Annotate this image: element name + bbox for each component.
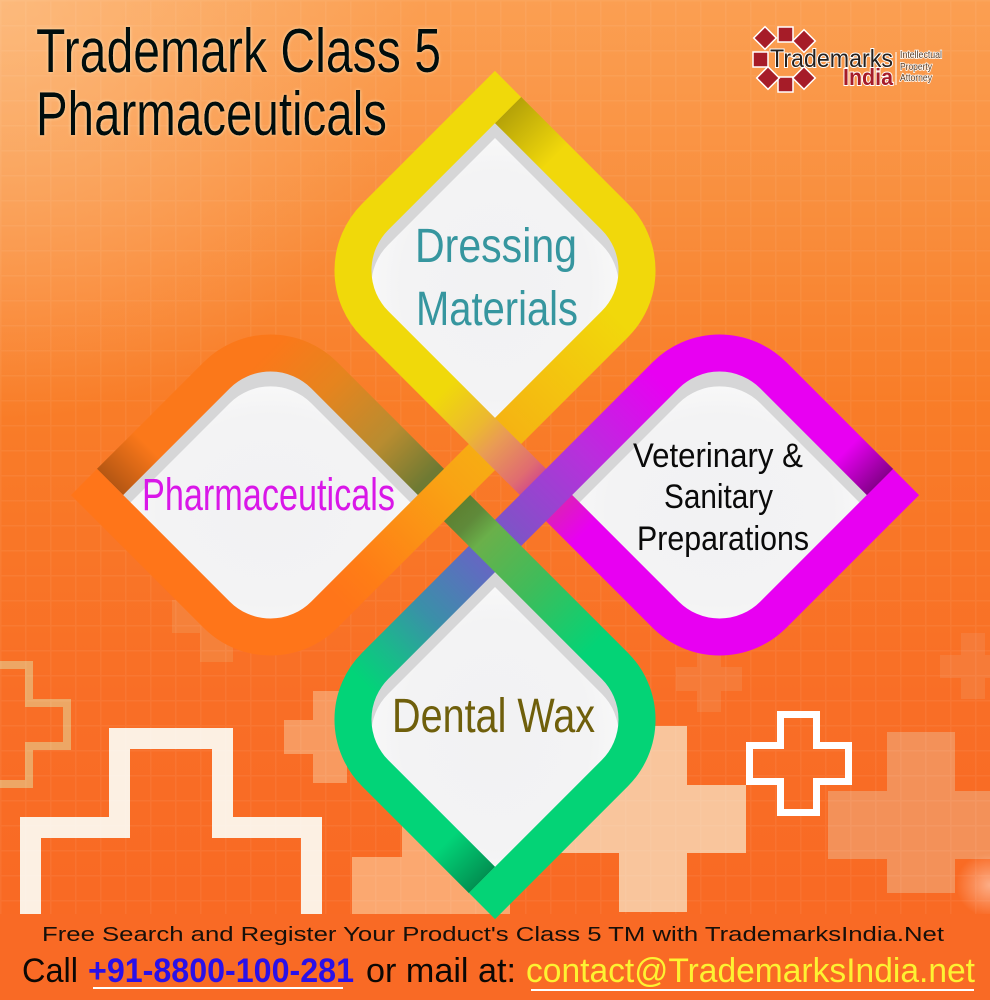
footer contact line: Call [22,952,78,990]
panel: Dental Wax: Dental Wax [392,690,595,743]
ribbon: yellow to orange [84,110,637,637]
footer contact line: +91-8800-100-281 [88,952,354,990]
footer contact line: or mail at: [366,952,516,990]
footer band [0,914,990,1000]
panel: Dressing Materials: Dressing [415,220,577,273]
panel: Veterinary and Sanitary Preparations: Sanitary [664,478,773,516]
title [36,17,441,149]
ribbon: yellow to magenta, lower half under purple [516,465,906,637]
woven ribbon petals [84,84,906,906]
panel: Dental Wax [372,572,618,880]
logo tagline: Intellectual [900,50,942,61]
panel: Veterinary and Sanitary Preparations [572,372,880,618]
panel: Veterinary and Sanitary Preparations: Veterinary & [633,437,803,475]
ribbon: magenta to green [353,353,880,880]
footer contact line [22,952,976,991]
footer tagline: Free Search and Register Your Product's Class 5 TM with TrademarksIndia.Net [42,924,945,946]
footer contact line: contact@TrademarksIndia.net [526,952,976,990]
logo tagline [900,50,942,84]
panel: Pharmaceuticals [110,372,418,618]
logo: Trademarks India [753,27,942,92]
title: Pharmaceuticals [36,80,387,149]
title: Trademark Class 5 [36,17,441,86]
logo wordmark: Trademarks [770,45,893,73]
logo wordmark: India [843,64,893,90]
logo wordmark [770,45,893,90]
panel: Pharmaceuticals: Pharmaceuticals [142,469,395,520]
icon: red square ring [753,27,815,92]
panel: Dressing Materials [372,110,618,418]
decorative crosses [0,570,990,917]
ribbon: orange to green [110,353,637,906]
panel: Dressing Materials: Materials [416,283,578,336]
logo tagline: Property [900,62,932,73]
panel: Veterinary and Sanitary Preparations: Preparations [637,520,809,558]
ribbon: yellow to magenta, upper half over orange [353,84,520,470]
logo tagline: Attorney [900,73,932,84]
